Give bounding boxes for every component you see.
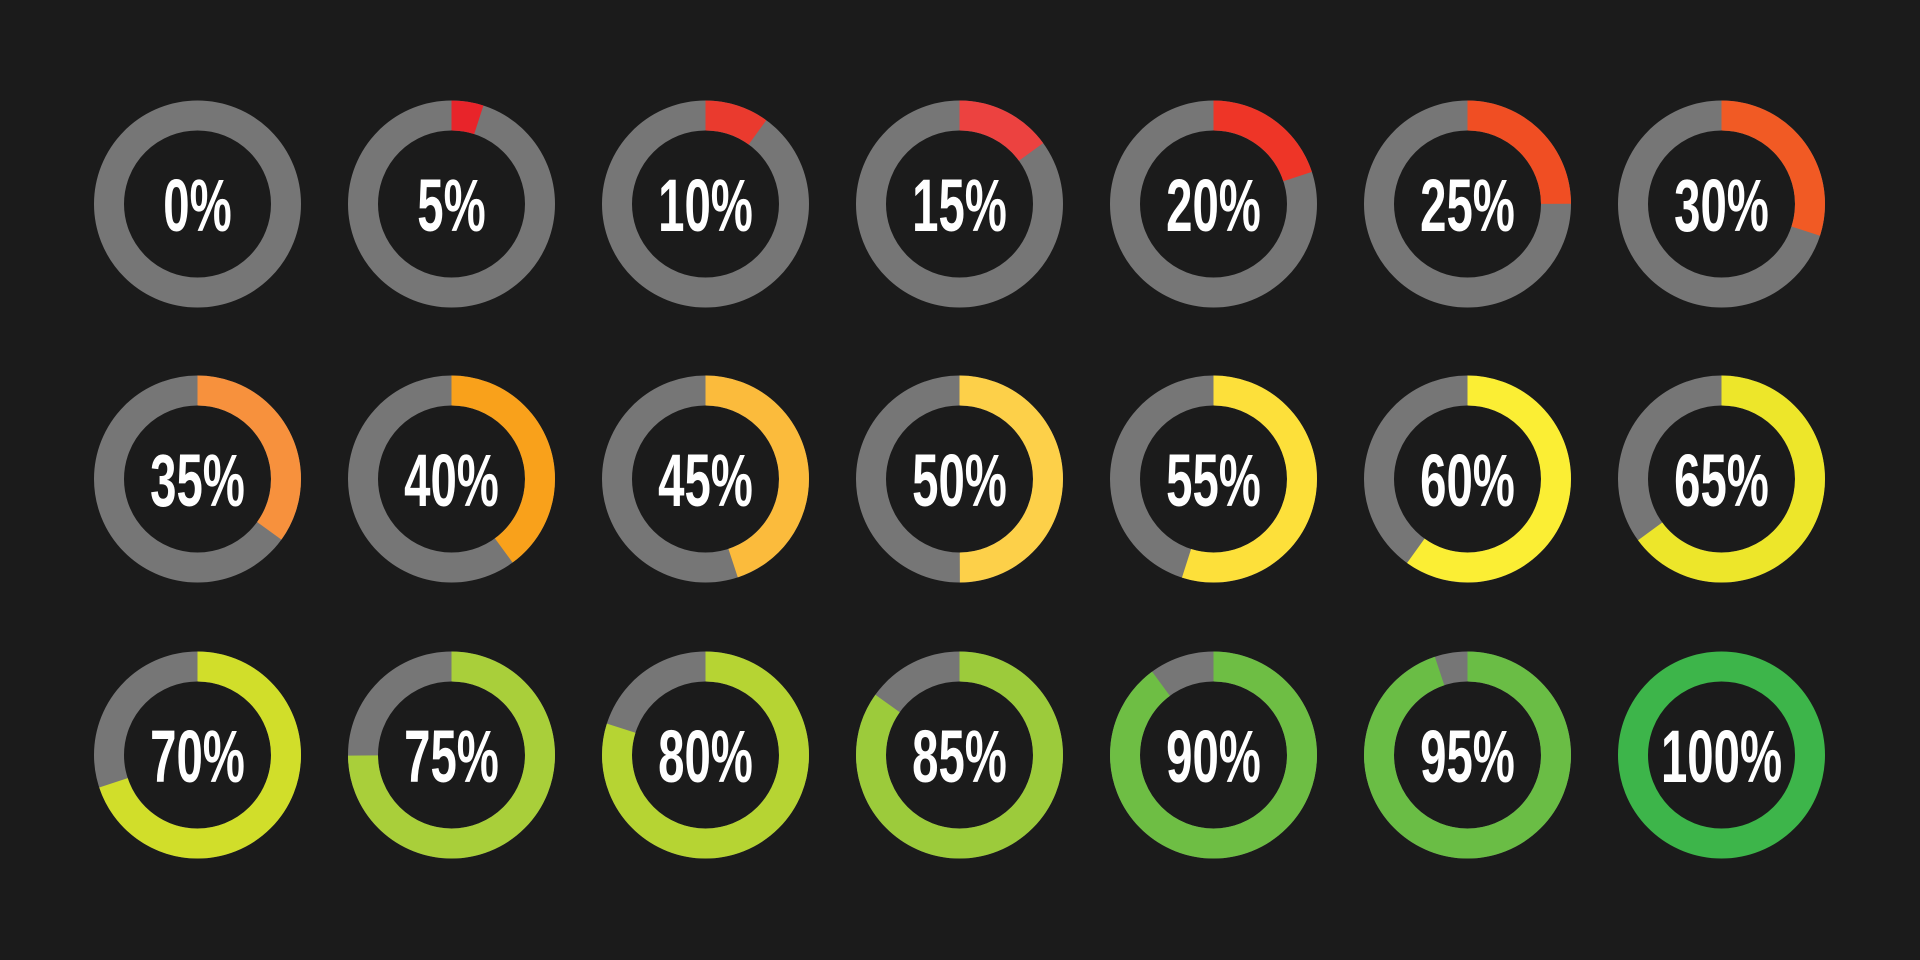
donut 10% [617,116,794,292]
donut 80%: 80% [658,716,753,799]
donut 95% [1379,666,1556,844]
donut 100% [1633,666,1810,844]
donut 15%: 15% [912,165,1007,248]
donut 5%: 5% [417,165,486,248]
donut 15% [871,116,1048,292]
donut 70% [109,666,286,844]
donut 55%: 55% [1166,440,1261,523]
donut 100%: 100% [1661,716,1782,799]
donut 90%: 90% [1166,716,1261,799]
donut 65%: 65% [1674,440,1769,523]
donut 85% [871,666,1048,844]
donut 45% [617,390,794,568]
donut 0% [109,116,286,292]
donut 35%: 35% [150,440,245,523]
donut 30% [1633,116,1810,292]
donut 85%: 85% [912,716,1007,799]
donut 55% [1125,390,1302,568]
donut 65% [1633,390,1810,568]
donut 80% [617,666,794,844]
donut 40%: 40% [404,440,499,523]
donut 70%: 70% [150,716,245,799]
donut 50%: 50% [912,440,1007,523]
donut 95%: 95% [1420,716,1515,799]
donut 90% [1125,666,1302,844]
donut 25% [1379,116,1556,292]
donut 60% [1379,390,1556,568]
donut 45%: 45% [658,440,753,523]
donut 0%: 0% [163,165,232,248]
donut 30%: 30% [1674,165,1769,248]
donut 50% [871,390,1048,568]
donut 75%: 75% [404,716,499,799]
donut 20%: 20% [1166,165,1261,248]
donut 5% [363,116,540,292]
donut 60%: 60% [1420,440,1515,523]
donut 20% [1125,116,1302,292]
donut 35% [109,390,286,568]
donut 40% [363,390,540,568]
donut 10%: 10% [658,165,753,248]
donut 75% [363,666,540,844]
donut 25%: 25% [1420,165,1515,248]
